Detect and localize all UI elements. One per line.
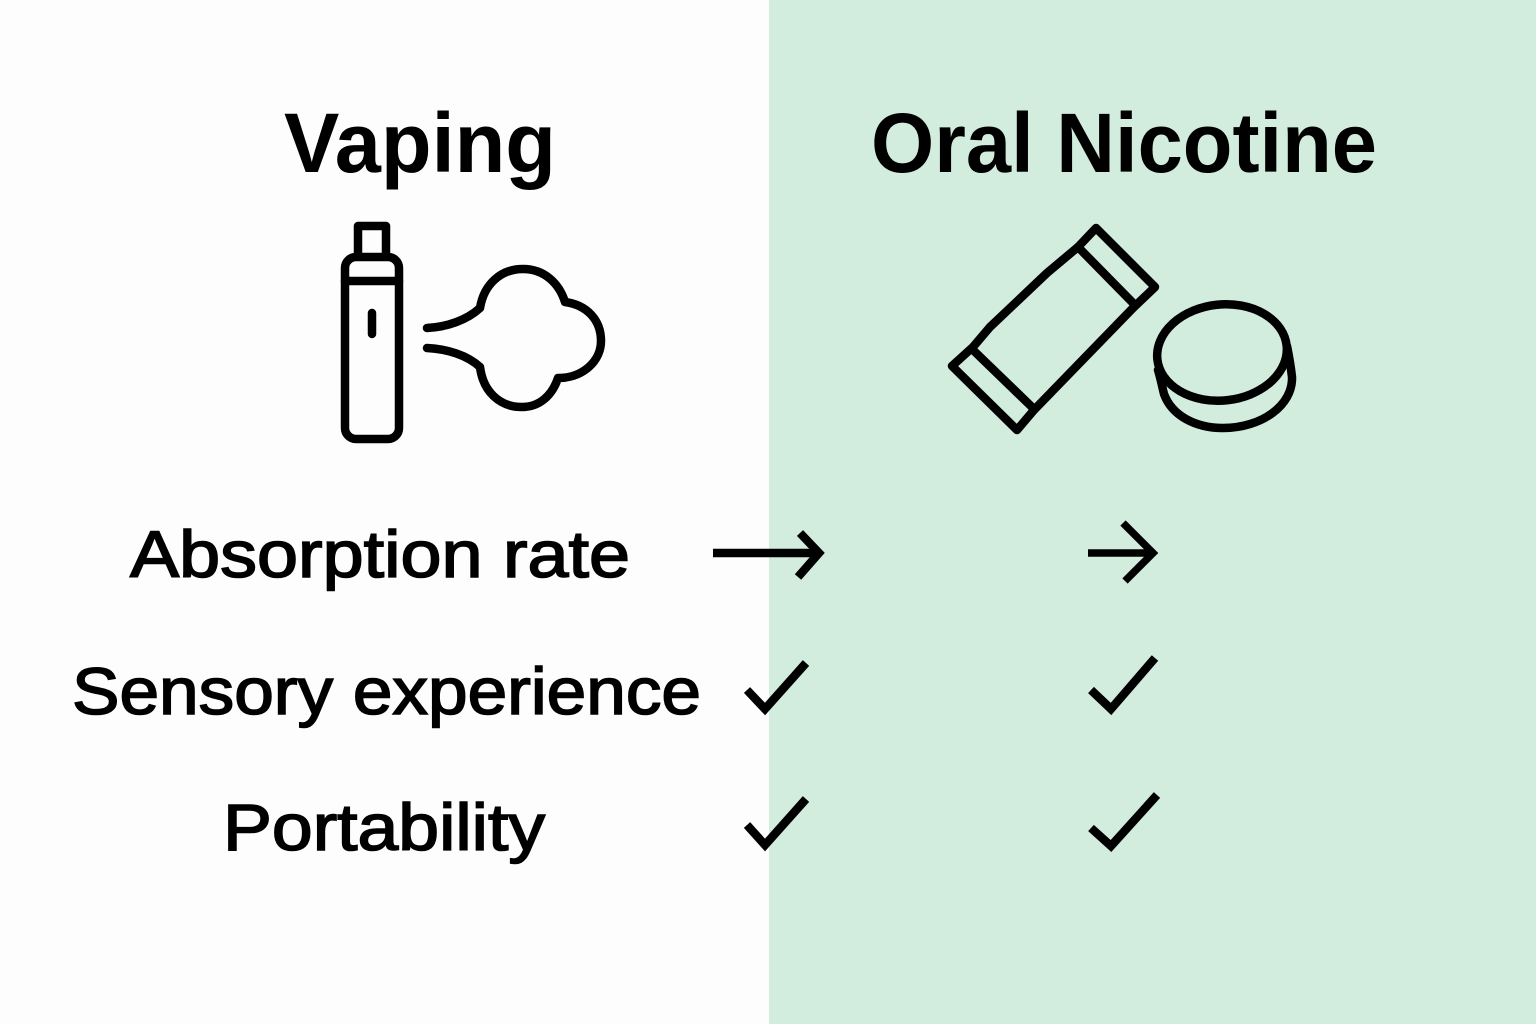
check: oral nicotine sensory experience bbox=[1091, 658, 1155, 709]
row label: Portability: Portability bbox=[223, 790, 545, 864]
row label: Sensory experience: Sensory experience bbox=[72, 654, 701, 728]
icon: nicotine pouch bbox=[952, 228, 1155, 430]
arrow: vaping absorption rate bbox=[713, 533, 819, 577]
check: vaping portability bbox=[747, 799, 806, 845]
arrow: oral nicotine absorption rate bbox=[1088, 523, 1153, 581]
heading: Oral Nicotine: Oral Nicotine bbox=[871, 96, 1377, 190]
panel: vaping background bbox=[0, 0, 769, 1024]
icon: vape pen with cloud bbox=[345, 226, 601, 439]
check: oral nicotine portability bbox=[1091, 795, 1157, 846]
panel: oral nicotine background bbox=[769, 0, 1536, 1024]
check: vaping sensory experience bbox=[747, 663, 806, 709]
icon: nicotine tablet bbox=[1152, 298, 1292, 428]
row label: Absorption rate: Absorption rate bbox=[130, 517, 630, 591]
heading: Vaping: Vaping bbox=[284, 96, 556, 190]
